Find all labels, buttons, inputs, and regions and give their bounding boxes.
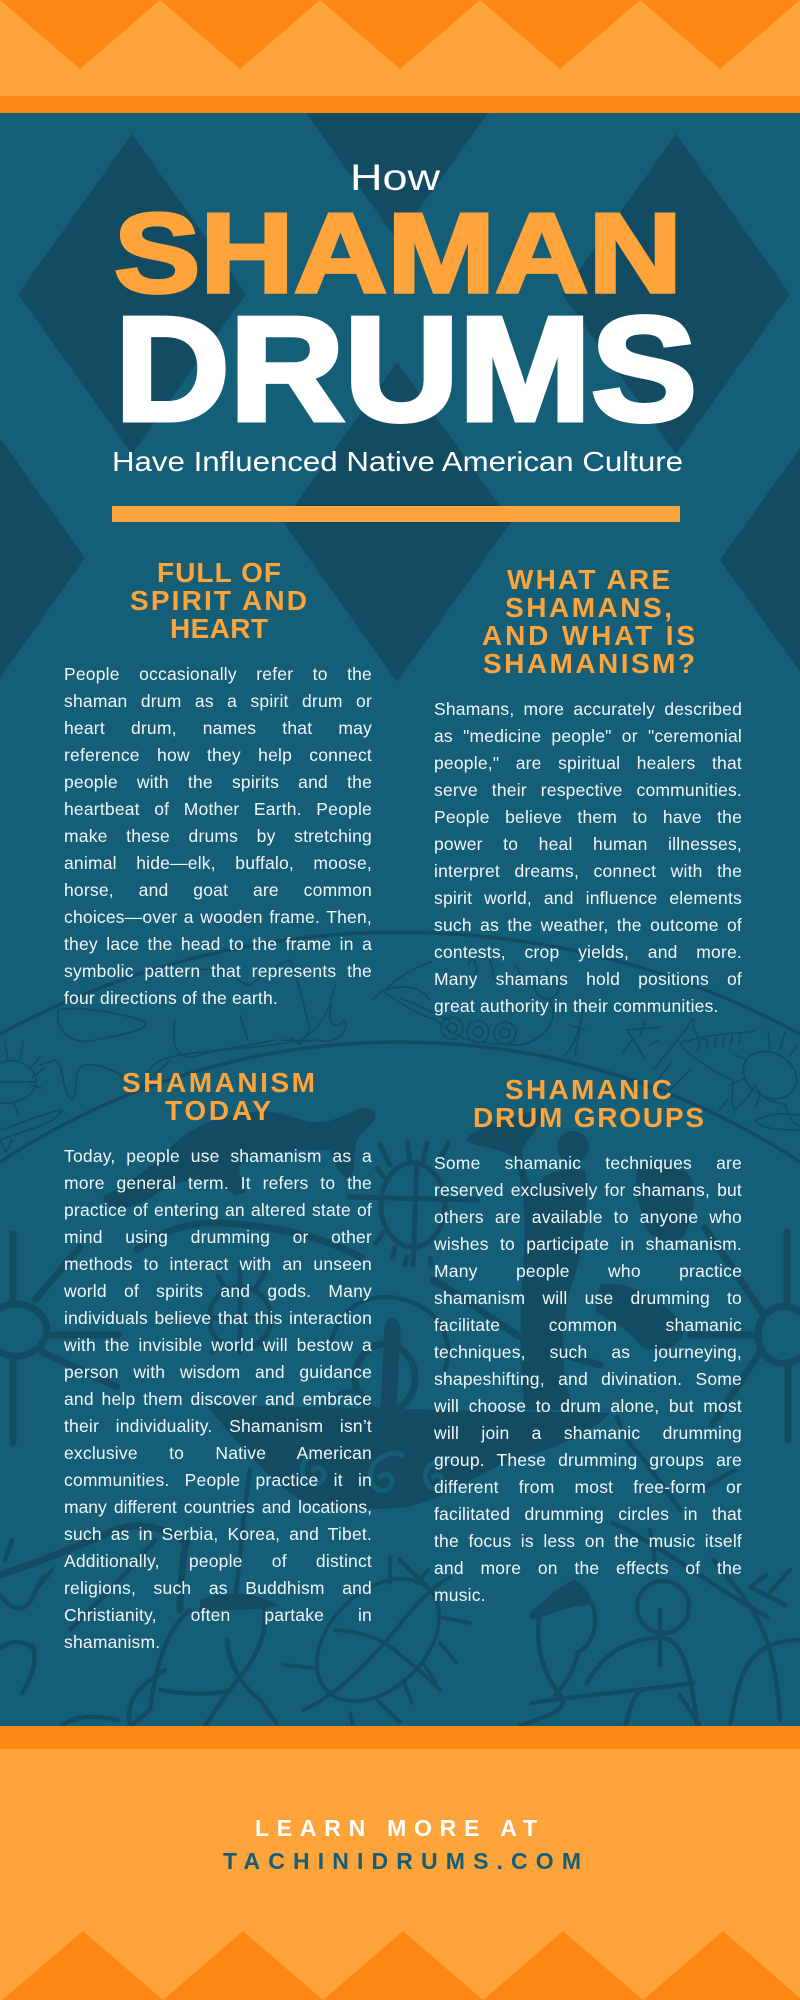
body text: person with wisdom and guidance <box>64 1362 372 1382</box>
drum arcs <box>0 932 800 1162</box>
body text: shamanism will use drumming to <box>434 1288 742 1308</box>
body text: world of spirits and gods. Many <box>64 1281 372 1301</box>
left shaman figure <box>62 1603 277 1726</box>
body text: great authority in their communities. <box>434 996 719 1016</box>
heading: WHAT ARE <box>507 564 670 595</box>
body text: music. <box>434 1585 486 1605</box>
panel: shamanism today <box>64 1067 372 1652</box>
thin line carvings <box>0 959 800 1152</box>
left sun <box>0 1234 118 1443</box>
body text: such as the weather, the outcome of <box>434 914 742 934</box>
body text <box>64 1146 372 1652</box>
large sun wheel centre <box>349 1143 477 1265</box>
footer band <box>0 1726 800 2000</box>
title <box>112 157 697 477</box>
heading: TODAY <box>165 1095 271 1126</box>
right shaman figure <box>400 1560 800 1726</box>
heading: SPIRIT AND <box>130 585 307 616</box>
body text: symbolic pattern that represents the <box>64 960 372 980</box>
heading: FULL OF <box>157 557 281 588</box>
body text: Today, people use shamanism as a <box>64 1146 372 1166</box>
body text: mind using drumming or other <box>64 1227 372 1247</box>
body text: religions, such as Buddhism and <box>64 1578 372 1598</box>
body text: many different countries and locations, <box>64 1497 372 1517</box>
body text: Some shamanic techniques are <box>434 1153 742 1173</box>
petroglyph drum artwork <box>0 932 800 1726</box>
sun wheel left of centre <box>205 1268 275 1352</box>
body text: People believe them to have the <box>434 806 742 826</box>
body text: they lace the head to the frame in a <box>64 934 372 954</box>
body text: reserved exclusively for shamans, but <box>434 1180 742 1200</box>
body text: facilitate common shamanic <box>434 1315 742 1335</box>
heading: HEART <box>170 613 268 644</box>
body text: reference how they help connect <box>64 744 372 764</box>
body text: individuals believe that this interaction <box>64 1308 372 1328</box>
panel: shamanic drum groups <box>434 1074 742 1605</box>
body text <box>434 1153 742 1605</box>
body text: animal hide—elk, buffalo, moose, <box>64 852 372 872</box>
body text: Christianity, often partake in <box>64 1605 372 1625</box>
body text: contests, crop yields, and more. <box>434 942 742 962</box>
right sun <box>690 1228 800 1440</box>
body text: Additionally, people of distinct <box>64 1551 372 1571</box>
body text: with the invisible world will bestow a <box>64 1335 372 1355</box>
body text: make these drums by stretching <box>64 826 372 846</box>
body text: and help them discover and embrace <box>64 1389 372 1409</box>
title word: How: How <box>350 157 440 198</box>
heading: SHAMANISM? <box>483 648 695 679</box>
title word: SHAMAN: SHAMAN <box>114 190 682 316</box>
turtle figure <box>285 1555 470 1726</box>
body text: communities. People practice it in <box>64 1470 372 1490</box>
title word: DRUMS: DRUMS <box>115 287 697 452</box>
body text: methods to interact with an unseen <box>64 1254 372 1274</box>
body text: Many shamans hold positions of <box>434 968 742 988</box>
body text: the focus is less on the music itself <box>434 1531 742 1551</box>
body text: People occasionally refer to the <box>64 664 372 684</box>
heading: SHAMANS, <box>505 592 672 623</box>
body text: group. These drumming groups are <box>434 1450 742 1470</box>
body text: shamanism. <box>64 1632 160 1652</box>
heading <box>473 1074 704 1133</box>
arcs and flowing lines <box>0 1223 600 1610</box>
body text: will join a shamanic drumming <box>434 1423 742 1443</box>
body text: as "medicine people" or "ceremonial <box>434 726 742 746</box>
body text: their individuality. Shamanism isn’t <box>64 1416 372 1436</box>
spiral highlights <box>302 1453 455 1490</box>
panel: full of spirit and heart <box>64 557 372 1008</box>
body text: choices—over a wooden frame. Then, <box>64 906 372 926</box>
heading: SHAMANISM <box>122 1067 315 1098</box>
body text <box>434 698 742 1016</box>
heading: DRUM GROUPS <box>473 1102 704 1133</box>
panel: what are shamans <box>434 564 742 1016</box>
heading <box>130 557 307 644</box>
heading: SHAMANIC <box>505 1074 672 1105</box>
call to action: learn more: LEARN MORE AT <box>255 1815 537 1841</box>
body text: will choose to drum alone, but most <box>434 1396 742 1416</box>
top zigzag triangles <box>0 0 800 69</box>
body text: serve their respective communities. <box>434 780 742 800</box>
body text: such as in Serbia, Korea, and Tibet. <box>64 1524 372 1544</box>
diamond pattern <box>0 113 800 682</box>
subtitle: Have Influenced Native American Culture <box>112 446 683 477</box>
heading <box>122 1067 315 1126</box>
body text: four directions of the earth. <box>64 988 278 1008</box>
body text: facilitated drumming circles in that <box>434 1504 742 1524</box>
heading <box>482 564 695 679</box>
body text <box>64 664 372 1008</box>
heading: AND WHAT IS <box>482 620 695 651</box>
body text: different from most free-form or <box>434 1477 742 1497</box>
large dark silhouettes <box>103 1106 694 1620</box>
bottom zigzag triangles <box>2 1931 800 2000</box>
body text: heartbeat of Mother Earth. People <box>64 798 372 818</box>
body text: more general term. It refers to the <box>64 1173 372 1193</box>
body text: power to heal human illnesses, <box>434 834 742 854</box>
body text: people with the spirits and the <box>64 772 372 792</box>
body text: shaman drum as a spirit drum or <box>64 690 372 710</box>
top header band <box>0 0 800 113</box>
body text: heart drum, names that may <box>64 718 372 738</box>
body text: techniques, such as journeying, <box>434 1342 742 1362</box>
call to action: website: TACHINIDRUMS.COM <box>223 1848 581 1874</box>
body text: wishes to participate in shamanism. <box>434 1234 742 1254</box>
body text: people," are spiritual healers that <box>434 752 742 772</box>
body text: and more on the effects of the <box>434 1558 742 1578</box>
title divider bar <box>112 506 680 522</box>
body text: interpret dreams, connect with the <box>434 860 742 880</box>
body text: others are available to anyone who <box>434 1207 742 1227</box>
body text: practice of entering an altered state of <box>64 1200 372 1220</box>
body text: Shamans, more accurately described <box>434 698 742 718</box>
body text: spirit world, and influence elements <box>434 888 742 908</box>
body text: shapeshifting, and divination. Some <box>434 1369 742 1389</box>
body text: Many people who practice <box>434 1261 742 1281</box>
body text: horse, and goat are common <box>64 880 372 900</box>
body text: exclusive to Native American <box>64 1443 372 1463</box>
